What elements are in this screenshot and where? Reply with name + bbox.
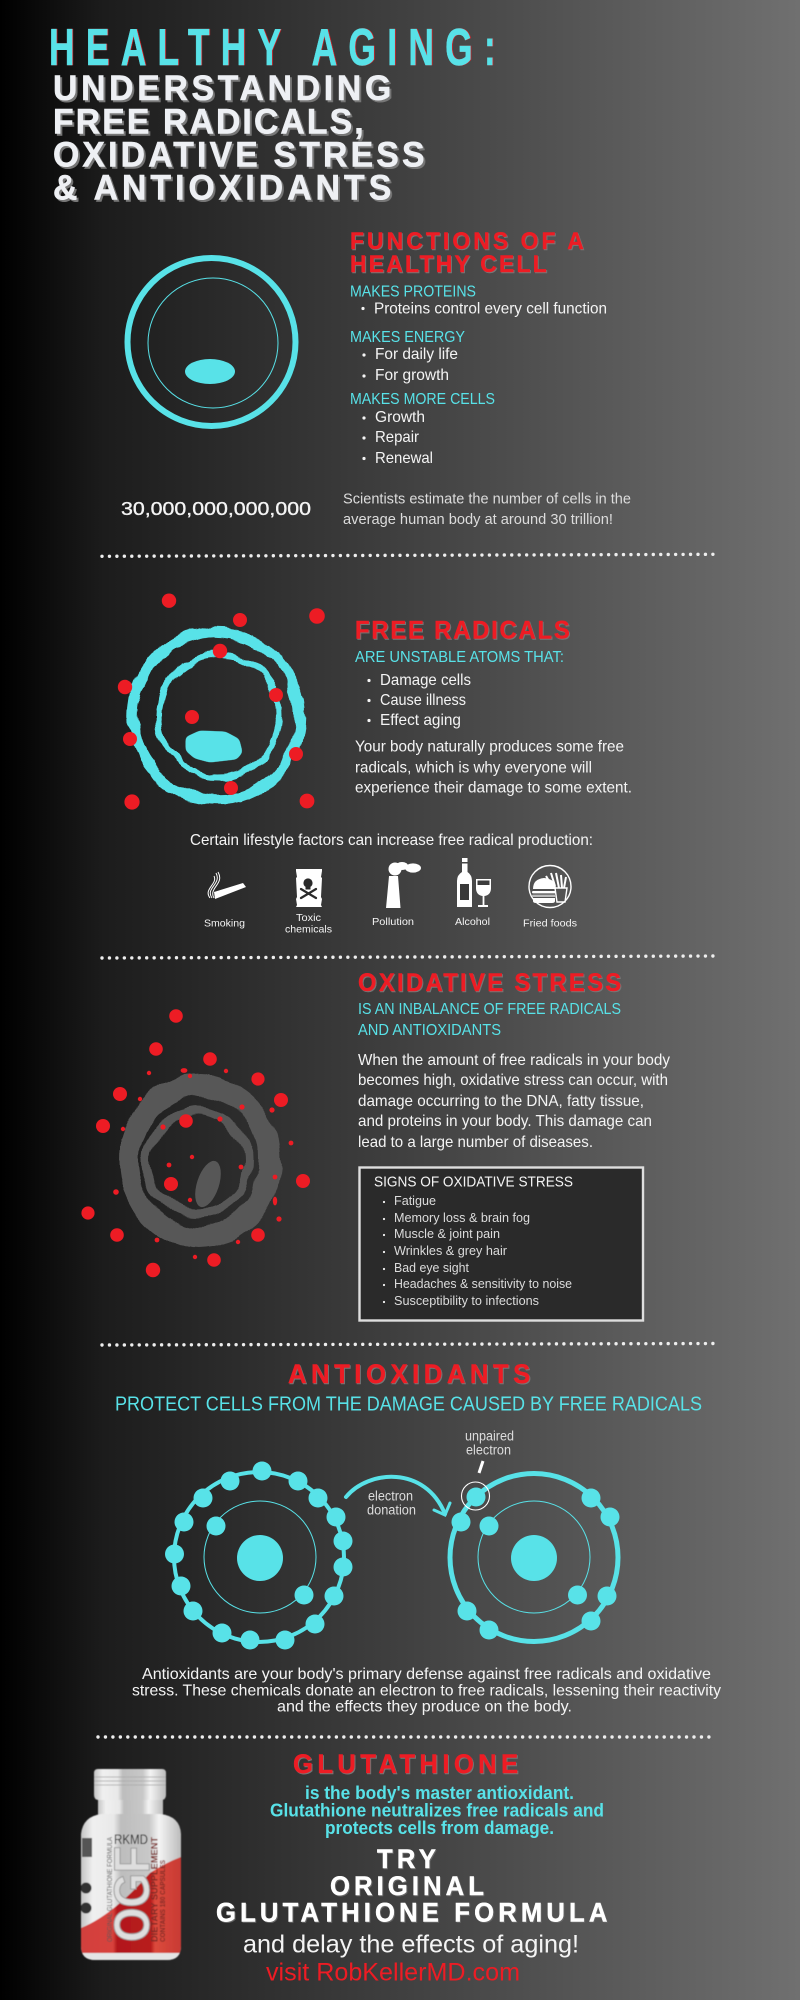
icon: pollution <box>372 862 421 928</box>
product bottle: OGF <box>104 1846 160 1942</box>
icon: pollution: Pollution <box>372 916 414 928</box>
icon: antioxidant atom <box>165 1462 352 1650</box>
callout: signs of oxidative stress: Susceptibility to infections <box>394 1293 539 1308</box>
list: cell functions: Growth <box>375 409 425 426</box>
callout: signs of oxidative stress: Memory loss & brain fog <box>394 1210 530 1225</box>
heading: functions of a healthy cell: HEALTHY CELL <box>350 250 547 277</box>
icon: toxic chemicals <box>285 869 332 936</box>
text: master antioxidant: Glutathione neutralizes free radicals and <box>270 1801 604 1821</box>
subheading: imbalance <box>358 1001 621 1039</box>
label: unpaired electron <box>465 1429 514 1473</box>
panel: antioxidants <box>115 1358 721 1716</box>
text: master antioxidant <box>270 1783 604 1838</box>
subheading: unstable atoms: ARE UNSTABLE ATOMS THAT: <box>355 649 564 666</box>
callout: signs of oxidative stress: Bad eye sight <box>394 1260 469 1275</box>
text: delay the effects: and delay the effects of aging! <box>243 1931 579 1959</box>
callout: signs of oxidative stress: Headaches & sensitivity to noise <box>394 1276 572 1291</box>
text: oxidative stress paragraph: and proteins in your body. This damage can <box>358 1113 652 1130</box>
heading: functions of a healthy cell: FUNCTIONS OF A <box>350 227 584 254</box>
list: cell functions: MAKES ENERGY <box>350 329 465 346</box>
callout: signs of oxidative stress: Fatigue <box>394 1193 436 1208</box>
text: natural free radicals paragraph <box>355 739 632 797</box>
text: oxidative stress paragraph: damage occurring to the DNA, fatty tissue, <box>358 1093 644 1110</box>
text: cell count note: average human body at around 30 trillion! <box>343 511 613 528</box>
subheading: protect cells: PROTECT CELLS FROM THE DAMAGE CAUSED BY FREE RADICALS <box>115 1394 702 1416</box>
list: cell functions: For daily life <box>375 346 458 363</box>
subtitle lines <box>53 69 424 208</box>
list: effects of free radicals: Effect aging <box>380 712 461 729</box>
call to action: ORIGINAL <box>330 1870 484 1901</box>
heading: oxidative stress: OXIDATIVE STRESS <box>358 969 621 997</box>
panel: healthy cell <box>121 227 631 528</box>
product bottle: RKMD <box>114 1832 148 1847</box>
title block <box>49 19 496 208</box>
heading: glutathione: GLUTATHIONE <box>293 1748 518 1779</box>
text: antioxidants paragraph: stress. These chemicals donate an electron to free radicals, lessening their reactivity <box>132 1683 721 1700</box>
list: cell functions: Repair <box>375 429 420 446</box>
subtitle lines: FREE RADICALS, <box>53 103 364 142</box>
list: cell functions: MAKES PROTEINS <box>350 284 476 300</box>
icon: toxic chemicals: chemicals <box>285 924 332 936</box>
list: cell functions: Renewal <box>375 450 433 467</box>
product bottle <box>80 1769 181 1960</box>
heading: free radicals: FREE RADICALS <box>355 617 570 645</box>
call to action <box>216 1843 607 1928</box>
text: natural free radicals paragraph: Your body naturally produces some free <box>355 739 624 756</box>
call to action: GLUTATHIONE FORMULA <box>216 1897 607 1928</box>
icon: alcohol: Alcohol <box>455 916 490 928</box>
text: oxidative stress paragraph: lead to a large number of diseases. <box>358 1134 593 1151</box>
product bottle: CONTAINS 180 CAPSULES <box>160 1860 167 1942</box>
text: cell count note <box>343 490 631 528</box>
icon: healthy cell diagram <box>128 258 296 426</box>
text: natural free radicals paragraph: radicals, which is why everyone will <box>355 760 592 777</box>
call to action: TRY <box>377 1843 436 1874</box>
icon: damaged cell with free radicals <box>118 594 325 810</box>
product bottle: ORIGINAL GLUTATHIONE FORMULA <box>107 1837 114 1942</box>
icon: alcohol <box>455 858 491 928</box>
text: natural free radicals paragraph: experience their damage to some extent. <box>355 780 632 797</box>
text: antioxidants paragraph <box>132 1666 721 1716</box>
text: oxidative stress paragraph <box>358 1052 670 1151</box>
icon: smoking <box>204 872 246 930</box>
panel: oxidative stress <box>81 969 670 1320</box>
label: electron donation: electron <box>368 1489 413 1504</box>
label: unpaired electron: electron <box>466 1442 511 1457</box>
icon: fried foods: Fried foods <box>523 918 577 930</box>
list: effects of free radicals: Damage cells <box>380 672 471 689</box>
text: lifestyle factors intro: Certain lifestyle factors can increase free radical production: <box>190 832 593 849</box>
label: electron donation: donation <box>367 1502 416 1517</box>
list: cell functions: Proteins control every cell function <box>374 300 607 318</box>
label: unpaired electron: unpaired <box>465 1429 514 1444</box>
icon: toxic chemicals: Toxic <box>296 912 321 924</box>
title: healthy aging: HEALTHY AGING: <box>49 19 496 77</box>
heading: antioxidants: ANTIOXIDANTS <box>288 1358 530 1389</box>
callout: signs of oxidative stress <box>360 1168 643 1320</box>
text: cell count note: Scientists estimate the number of cells in the <box>343 490 631 508</box>
icon: smoking: Smoking <box>204 918 245 930</box>
arrow: electron donation <box>346 1477 450 1515</box>
subtitle lines: OXIDATIVE STRESS <box>53 136 424 175</box>
stat: thirty trillion cells: 30,000,000,000,000 <box>121 498 311 519</box>
icon: oxidized cell with free radicals <box>81 1009 310 1277</box>
list: cell functions: For growth <box>375 367 449 384</box>
link text: visit website: visit RobKellerMD.com <box>266 1959 520 1987</box>
list: cell functions <box>350 284 607 467</box>
heading: functions of a healthy cell <box>350 227 584 277</box>
label: electron donation <box>367 1489 416 1517</box>
text: antioxidants paragraph: Antioxidants are your body's primary defense against free radicals and oxidative <box>142 1666 711 1683</box>
text: oxidative stress paragraph: becomes high, oxidative stress can occur, with <box>358 1072 668 1089</box>
icon: free radical atom <box>450 1474 620 1642</box>
text: antioxidants paragraph: and the effects they produce on the body. <box>277 1699 572 1716</box>
text: oxidative stress paragraph: When the amount of free radicals in your body <box>358 1052 670 1069</box>
subtitle lines: UNDERSTANDING <box>53 69 391 108</box>
subtitle lines: & ANTIOXIDANTS <box>53 169 391 208</box>
list: effects of free radicals <box>367 672 471 729</box>
icon: fried foods <box>523 866 577 930</box>
text: master antioxidant: is the body's master antioxidant. <box>305 1783 574 1803</box>
callout: signs of oxidative stress: Wrinkles & grey hair <box>394 1243 508 1258</box>
panel: glutathione <box>80 1748 607 1987</box>
callout: signs of oxidative stress: Muscle & joint pain <box>394 1226 500 1241</box>
list: cell functions: MAKES MORE CELLS <box>350 391 495 408</box>
text: master antioxidant: protects cells from damage. <box>325 1818 554 1838</box>
panel: free radicals <box>118 594 632 936</box>
subheading: imbalance: AND ANTIOXIDANTS <box>358 1022 501 1039</box>
list: effects of free radicals: Cause illness <box>380 692 466 709</box>
subheading: imbalance: IS AN INBALANCE OF FREE RADICALS <box>358 1001 621 1018</box>
callout: signs of oxidative stress: SIGNS OF OXIDATIVE STRESS <box>374 1174 573 1191</box>
product bottle: DIETARY SUPPLEMENT <box>150 1837 160 1942</box>
